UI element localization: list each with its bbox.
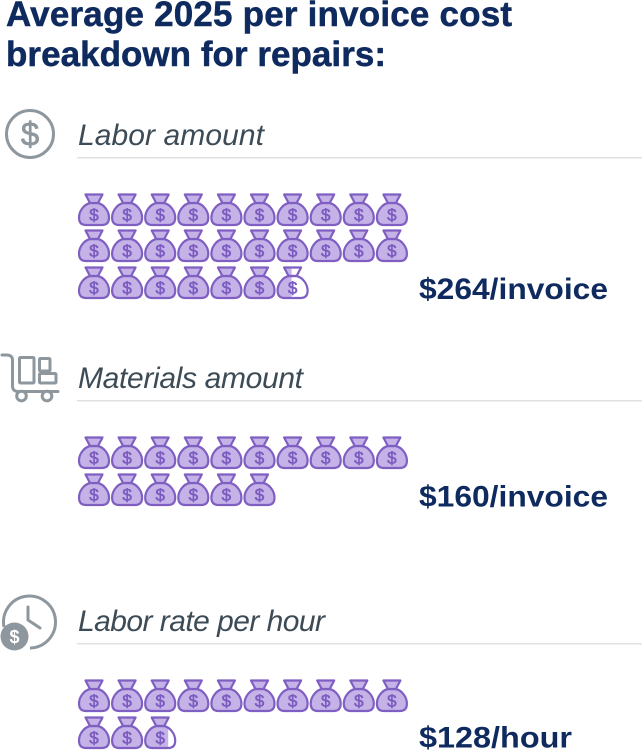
title: breakdown for repairs: [6, 35, 386, 74]
icon: clock with coin [0, 596, 56, 650]
pictogram: labor amount bags [79, 194, 407, 298]
pictogram: labor amount bags: $$$$$$$ [89, 278, 298, 298]
heading: labor amount: Labor amount [78, 119, 266, 152]
pictogram: materials amount bags: $$$$$$$$$$ [89, 448, 397, 468]
pictogram: labor amount bags: $$$$$$$$$$ [89, 206, 397, 224]
icon: clock with coin: $ [9, 627, 20, 647]
heading: labor rate per hour: Labor rate per hour [78, 605, 326, 638]
pictogram: labor rate bags [79, 680, 407, 748]
value: materials amount: $160/invoice [419, 480, 608, 514]
panel: materials amount [2, 355, 642, 514]
pictogram: materials amount bags: $$$$$$ [89, 486, 265, 504]
heading: materials amount: Materials amount [78, 362, 305, 395]
icon: cart with boxes [2, 355, 58, 401]
panel: labor amount [6, 110, 642, 306]
pictogram: materials amount bags [79, 438, 407, 505]
icon: dollar coin: $ [21, 116, 39, 152]
pictogram: labor rate bags: $$$ [89, 728, 165, 748]
value: labor amount: $264/invoice [419, 273, 608, 306]
icon: dollar coin [6, 110, 54, 158]
title [6, 0, 512, 74]
pictogram: labor rate bags: $$$$$$$$$$ [89, 692, 397, 710]
panel: labor rate per hour [0, 596, 642, 750]
pictogram: labor amount bags: $$$$$$$$$$ [89, 242, 397, 260]
